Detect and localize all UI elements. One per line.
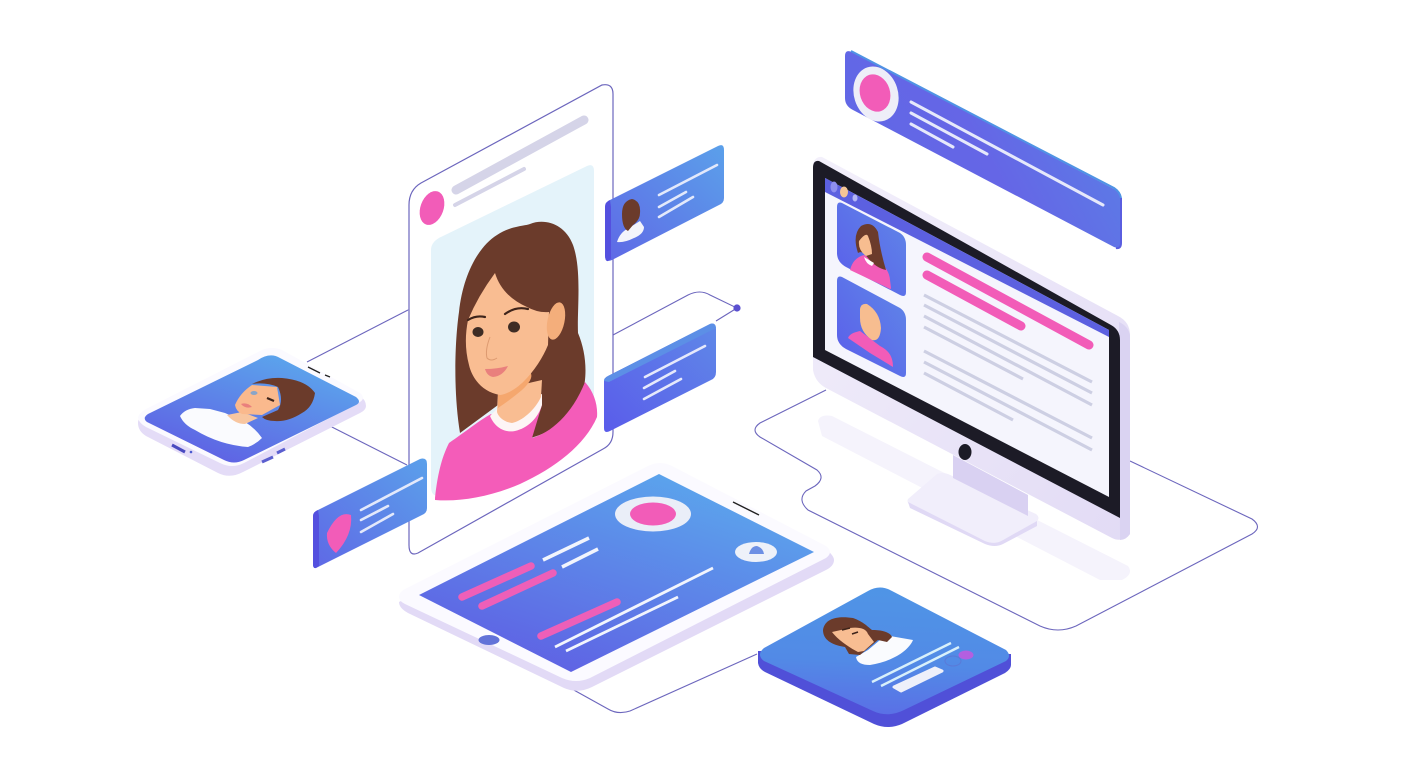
content lines xyxy=(924,295,1092,450)
monitor stand xyxy=(908,455,1038,546)
card lines xyxy=(644,346,705,399)
monitor body xyxy=(813,157,1130,540)
tablet avatar xyxy=(615,496,691,532)
floor outline around monitor xyxy=(755,390,1258,630)
monitor black bezel xyxy=(813,161,1120,518)
phone xyxy=(138,348,366,476)
card lines xyxy=(659,165,717,217)
browser title bar xyxy=(825,178,1109,337)
card: profile top right xyxy=(605,145,724,261)
avatar tile 2 xyxy=(837,276,906,377)
banner avatar circle xyxy=(846,61,906,127)
lips xyxy=(485,366,508,377)
tablet small badge xyxy=(735,542,777,562)
top banner card xyxy=(845,51,1121,248)
eyebrows xyxy=(468,308,528,320)
card: text middle right xyxy=(604,324,716,432)
headline bars xyxy=(927,257,1089,345)
card: heart lower left xyxy=(313,459,427,568)
face xyxy=(466,273,549,395)
card portrait xyxy=(823,617,913,665)
phone speaker xyxy=(308,367,330,377)
monitor xyxy=(813,157,1130,546)
card toggle xyxy=(945,650,974,666)
tablet white lines xyxy=(543,538,713,651)
monitor screen xyxy=(825,178,1109,497)
neck xyxy=(497,380,542,423)
panel title lines xyxy=(455,120,584,205)
floor reflection stripe xyxy=(818,416,1130,580)
nose xyxy=(486,337,497,360)
eyes xyxy=(472,322,520,337)
profile card bottom right xyxy=(758,588,1011,727)
card lines xyxy=(872,643,959,686)
ear xyxy=(544,301,568,341)
panel avatar dot xyxy=(415,188,449,228)
tablet screen xyxy=(419,474,814,672)
card button xyxy=(894,668,942,691)
phone portrait xyxy=(180,378,315,447)
card lines xyxy=(361,478,422,532)
avatar tile 1 xyxy=(837,202,906,296)
photo background xyxy=(431,165,594,496)
main profile panel xyxy=(409,85,613,554)
phone screen xyxy=(145,355,359,462)
woman portrait xyxy=(435,222,597,500)
phone port xyxy=(172,445,285,462)
tablet speaker xyxy=(733,502,759,515)
shirt xyxy=(435,382,597,500)
hair back xyxy=(455,222,585,438)
monitor camera dot xyxy=(958,444,972,460)
connector end dot xyxy=(733,304,741,312)
collar xyxy=(490,394,542,431)
tablet xyxy=(399,463,834,691)
card avatar xyxy=(617,199,644,242)
connector lines xyxy=(307,235,757,713)
banner text lines xyxy=(911,102,1103,205)
tablet pink bars xyxy=(462,566,617,636)
card pink shape xyxy=(327,514,351,553)
tablet home button xyxy=(478,635,500,645)
